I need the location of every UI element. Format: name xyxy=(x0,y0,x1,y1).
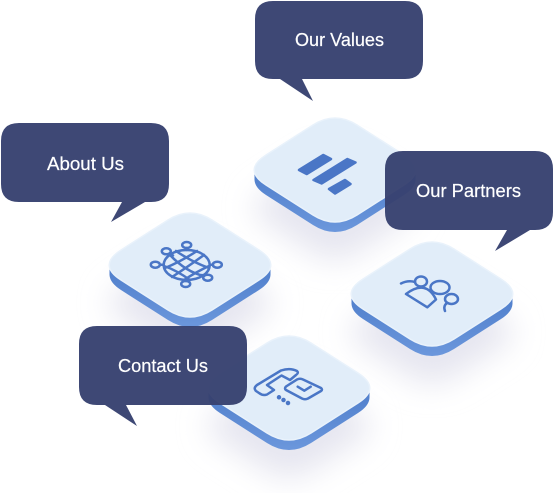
tile top xyxy=(208,336,370,440)
callout: about us: About Us xyxy=(47,154,124,174)
tile top xyxy=(254,118,416,222)
tile side xyxy=(352,294,512,356)
tile shadow xyxy=(351,280,513,384)
tile shadow xyxy=(109,251,271,355)
tile side xyxy=(110,265,270,327)
tile shadow xyxy=(208,374,370,478)
callout: contact us xyxy=(79,326,247,426)
tile: our partners xyxy=(351,242,513,384)
tile: our values xyxy=(254,118,416,260)
tile top xyxy=(351,242,513,346)
callout: our partners xyxy=(385,151,553,251)
icon: phone and message xyxy=(255,369,322,404)
tile top xyxy=(109,213,271,317)
tile: contact us xyxy=(208,336,370,478)
callout: our values xyxy=(255,1,423,101)
tile shadow xyxy=(254,156,416,260)
callout: our partners: Our Partners xyxy=(416,181,521,201)
icon: group of people xyxy=(401,276,458,311)
tile: about us xyxy=(109,213,271,355)
tile side xyxy=(254,170,416,232)
callout: contact us: Contact Us xyxy=(118,356,208,376)
icon: globe with nodes xyxy=(151,242,222,287)
icon: three slanted bars xyxy=(299,155,356,194)
tile side xyxy=(208,388,370,450)
callout: our values: Our Values xyxy=(295,30,384,50)
callout: about us xyxy=(1,123,169,222)
